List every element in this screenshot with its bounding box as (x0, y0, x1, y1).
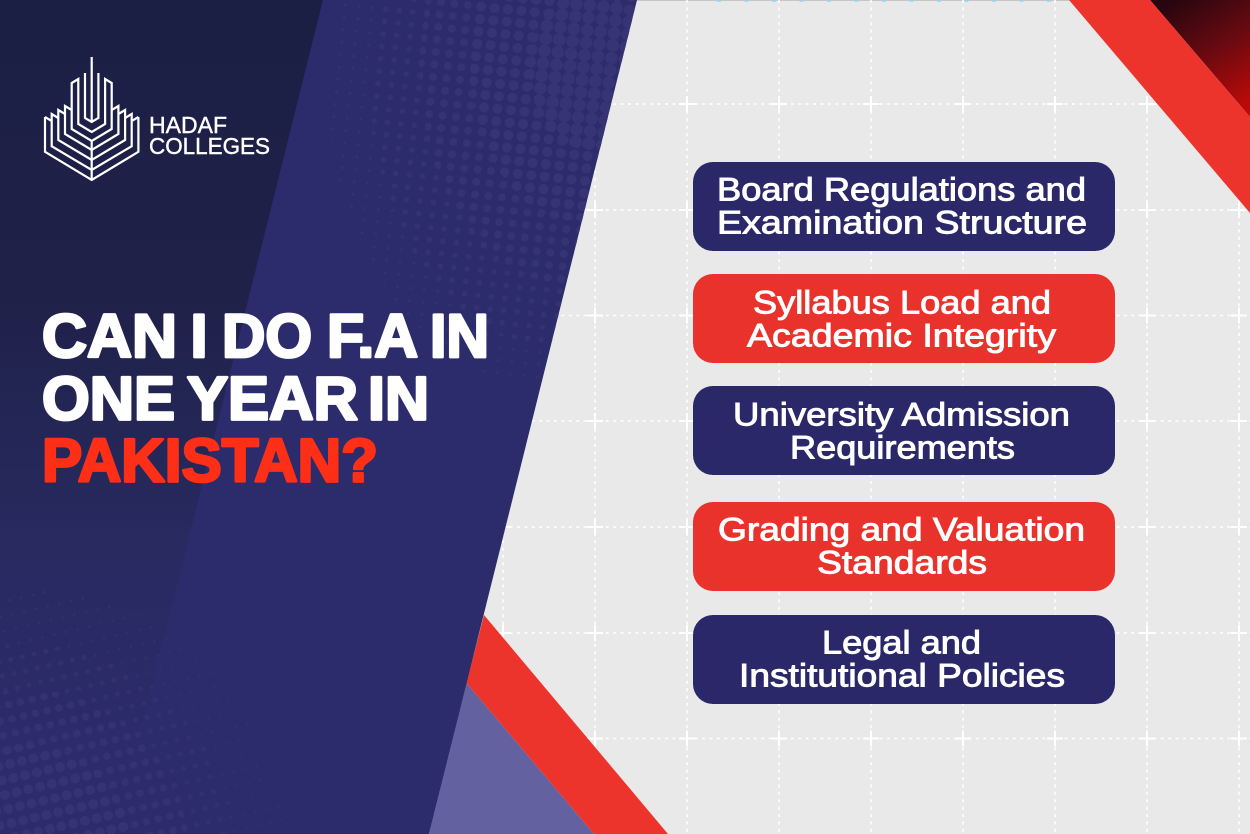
box: Grading and Valuation (693, 502, 1115, 591)
halftone: bottom-left (0, 590, 284, 834)
title: I (190, 302, 208, 370)
top edge strip (637, 0, 1070, 1)
box: Legal and Institutional: Institutional Policies (739, 658, 1065, 694)
box: Syllabus Load: Academic Integrity (747, 318, 1056, 354)
box: Legal and Institutional (693, 615, 1115, 704)
logo: Hadaf Colleges (45, 57, 270, 180)
box: University Admission: University Admission (733, 396, 1070, 432)
logo wordmark (149, 112, 270, 159)
box: University Admission: Requirements (790, 430, 1015, 466)
box: Syllabus Load (693, 274, 1115, 363)
logo wordmark: HADAF (149, 112, 227, 138)
title (42, 302, 489, 494)
title: DO (222, 302, 312, 370)
bottom red band (466, 615, 668, 834)
panel: dark navy (0, 0, 323, 834)
title: YEAR (187, 364, 358, 432)
title: PAKISTAN? (42, 426, 378, 494)
box: Grading and Valuation: Grading and Valuation (718, 512, 1085, 548)
icon: logo tower mark (45, 57, 138, 180)
halftone: top (420, 0, 635, 342)
box: Board Regulations (693, 162, 1115, 251)
title: F.A (327, 302, 418, 370)
box: Board Regulations: Examination Structure (717, 204, 1087, 240)
title: IN (368, 364, 429, 432)
title: IN (430, 302, 489, 370)
bottom periwinkle triangle (429, 683, 594, 834)
dotted grid (480, 0, 1250, 834)
title: ONE (42, 364, 175, 432)
top-right dark corner (1150, 0, 1250, 117)
panel: blue (0, 0, 637, 834)
box: Legal and Institutional: Legal and (822, 624, 981, 660)
box: University Admission (693, 386, 1115, 475)
box: Grading and Valuation: Standards (817, 544, 987, 580)
box: Syllabus Load: Syllabus Load and (753, 284, 1051, 320)
top-right red band (1069, 0, 1250, 213)
title: CAN (42, 302, 177, 370)
logo wordmark: COLLEGES (149, 133, 270, 159)
box: Board Regulations: Board Regulations and (717, 172, 1086, 208)
